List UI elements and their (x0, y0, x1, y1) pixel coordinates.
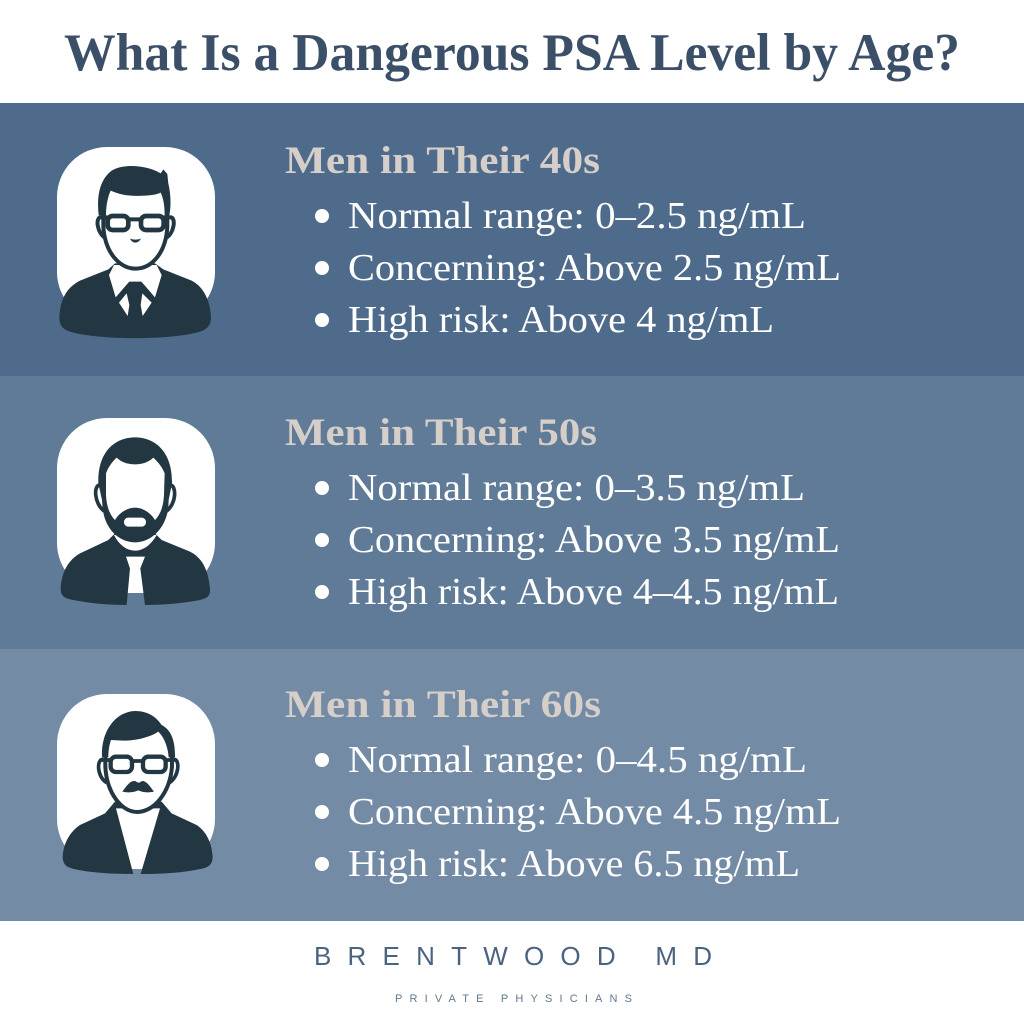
list: 60s ranges: Normal range: 0–4.5 ng/mL (348, 739, 807, 781)
panel: men in their 60s (0, 649, 1024, 921)
title: What Is a Dangerous PSA Level by Age? (64, 24, 960, 82)
list: 50s ranges: Normal range: 0–3.5 ng/mL (348, 467, 805, 509)
panel: men in their 40s (0, 103, 1024, 376)
logo: Brentwood MD: BRENTWOOD MD (314, 941, 712, 971)
list: 60s ranges (315, 739, 841, 885)
list: 50s ranges: High risk: Above 4–4.5 ng/mL (348, 571, 839, 613)
logo: Brentwood MD (314, 941, 712, 1005)
list: 60s ranges: High risk: Above 6.5 ng/mL (348, 843, 800, 885)
list: 40s ranges (315, 195, 841, 341)
heading: 50s: Men in Their 50s (285, 411, 597, 454)
list: 40s ranges: Normal range: 0–2.5 ng/mL (348, 195, 806, 237)
list: 60s ranges: Concerning: Above 4.5 ng/mL (348, 791, 841, 833)
panel: men in their 50s (0, 376, 1024, 649)
logo: Brentwood MD: PRIVATE PHYSICIANS (395, 993, 632, 1005)
heading: 40s: Men in Their 40s (285, 139, 600, 182)
list: 50s ranges: Concerning: Above 3.5 ng/mL (348, 519, 840, 561)
heading: 60s: Men in Their 60s (285, 683, 601, 726)
list: 40s ranges: Concerning: Above 2.5 ng/mL (348, 247, 841, 289)
list: 50s ranges (315, 467, 840, 613)
icon: man with beard (57, 418, 215, 605)
icon: man with glasses and moustache (57, 694, 215, 874)
list: 40s ranges: High risk: Above 4 ng/mL (348, 299, 774, 341)
icon: man with glasses and tie (57, 147, 215, 338)
